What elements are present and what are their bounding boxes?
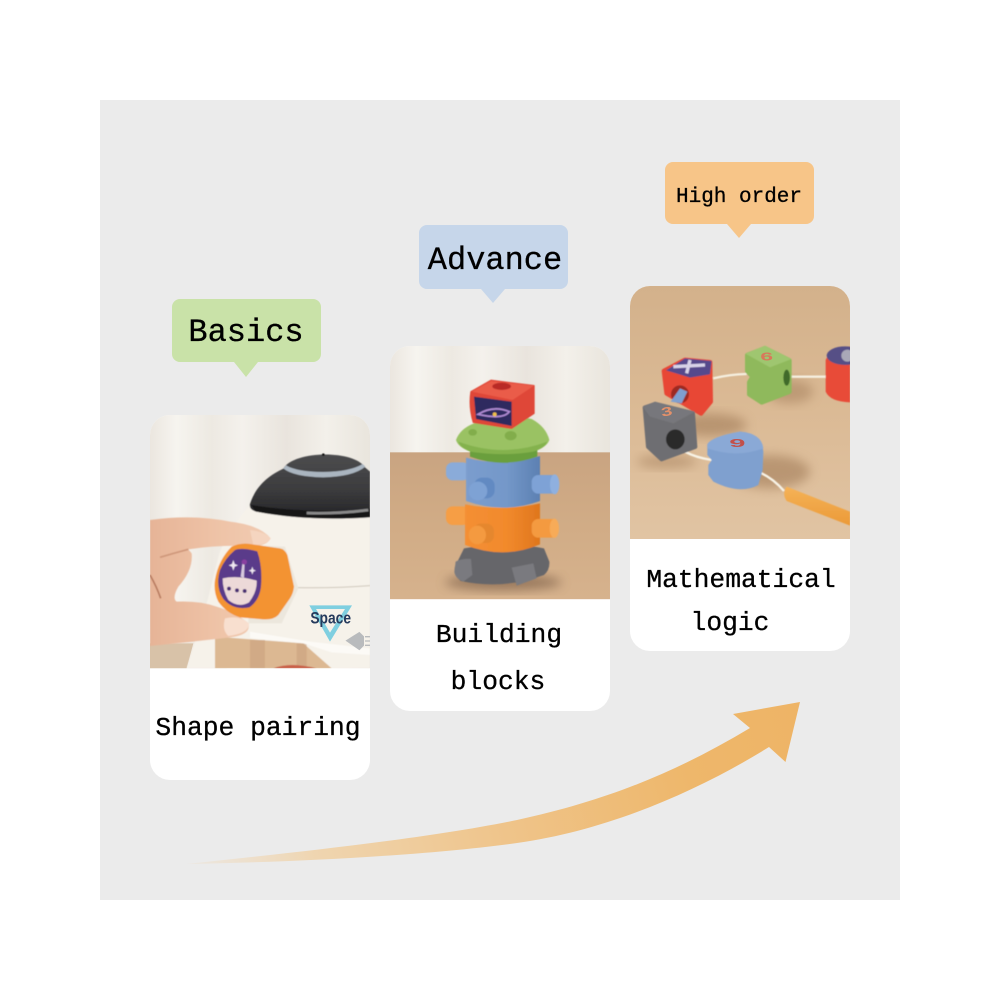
icon: Space triangle logo: Space [310, 608, 351, 627]
bead: green [745, 346, 792, 402]
speech bubble: High order [665, 162, 814, 238]
bead numbers: 6 [760, 350, 774, 364]
icon: Space triangle logo [309, 605, 352, 642]
speech bubble: Advance [419, 225, 568, 303]
label: Mathematical logic: logic [691, 608, 769, 638]
blue block [446, 456, 559, 508]
hand: thumb and finger [150, 517, 271, 646]
icon: orange shape block [215, 544, 294, 619]
background panel [100, 100, 900, 900]
grey base [454, 545, 549, 586]
speech bubble: Basics: Basics [188, 314, 304, 351]
card: Building blocks [390, 345, 610, 711]
bead numbers: 6 [729, 435, 746, 449]
speech bubble: High order: High order [676, 186, 802, 209]
label: Shape pairing: Shape pairing [155, 713, 361, 743]
photo: stacked building blocks [390, 345, 610, 599]
red cube [470, 380, 534, 428]
bead: grey [643, 402, 695, 459]
icon: grey rocket [347, 633, 370, 649]
label: Mathematical logic [646, 565, 836, 638]
label: Building blocks: blocks [451, 667, 545, 697]
speech bubble: Basics [172, 299, 321, 377]
orange lacing stick [784, 487, 850, 526]
bead numbers: 3 [660, 405, 674, 421]
bead: blue [707, 432, 763, 489]
orange block [446, 503, 559, 552]
speech bubble: Advance: Advance [428, 242, 562, 279]
bead: red round [825, 346, 850, 403]
card: Mathematical logic [630, 286, 863, 651]
growth arrow [186, 702, 800, 864]
card: Shape pairing [150, 415, 370, 780]
label: Mathematical logic: Mathematical [646, 565, 836, 595]
photo: threaded number beads [630, 286, 863, 539]
label: Building blocks: Building [436, 620, 562, 650]
bead numbers [660, 350, 774, 449]
bead: red pentagon [664, 358, 712, 413]
green mushroom block [456, 416, 549, 463]
label: Building blocks [436, 620, 562, 697]
photo: hand placing shape on rocket [150, 415, 370, 668]
